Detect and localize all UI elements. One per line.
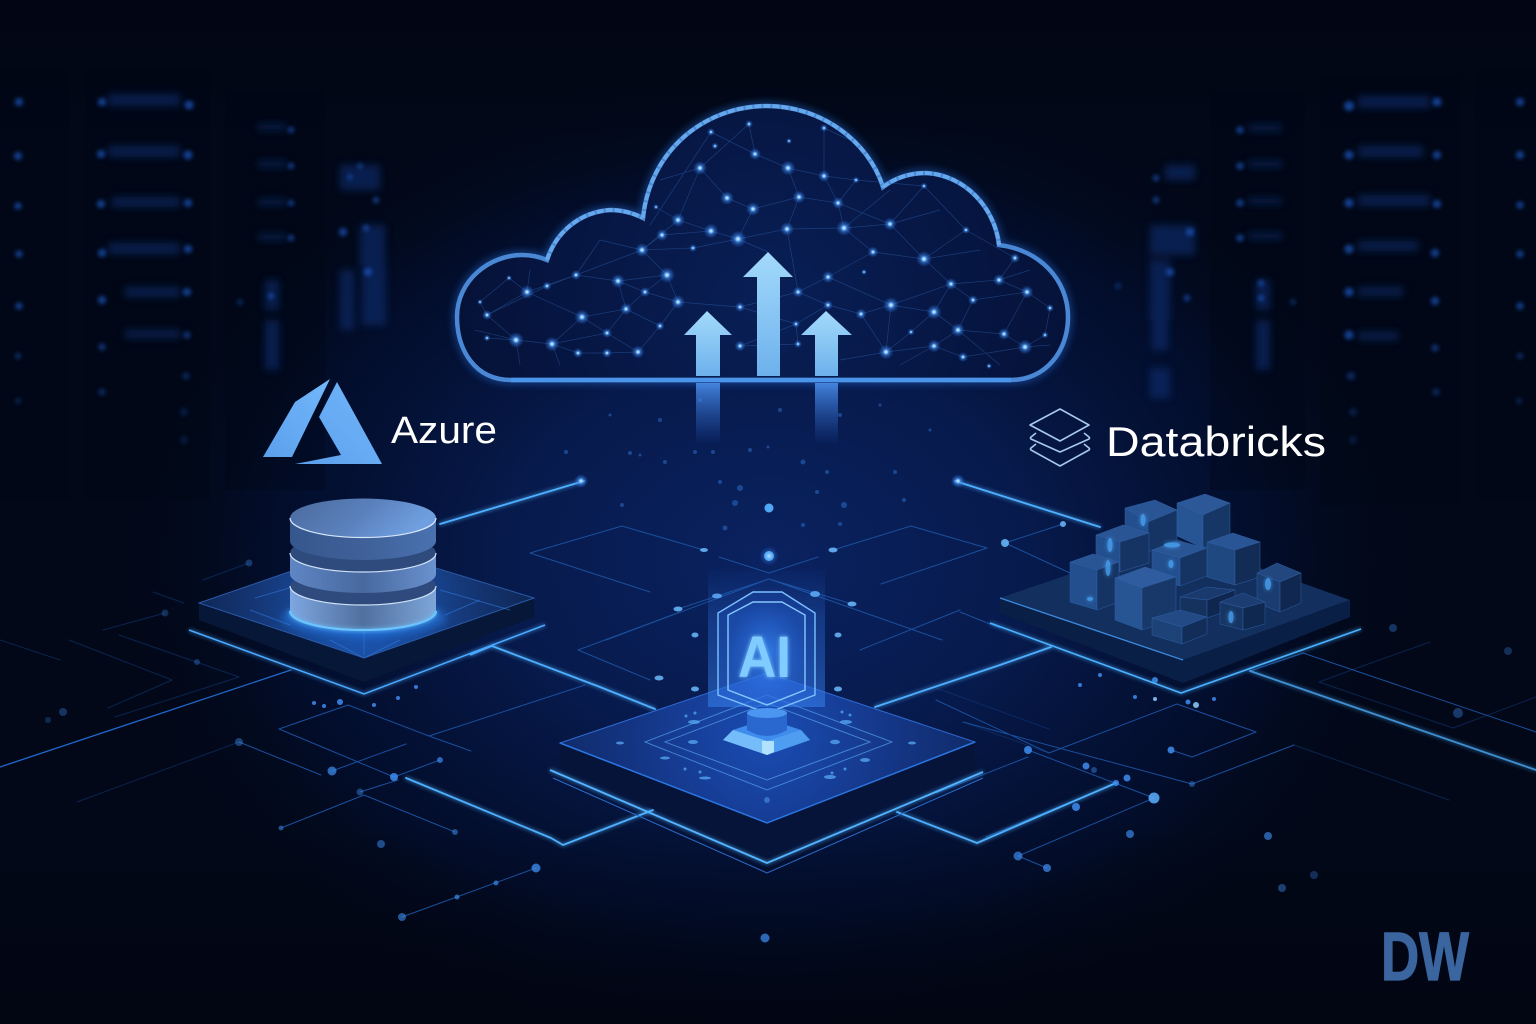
server racks: left bbox=[0, 70, 386, 500]
pedestal stem bbox=[747, 713, 787, 736]
arrow: left bbox=[684, 311, 732, 376]
cube: back left bbox=[1125, 500, 1177, 552]
outer thin frame bbox=[553, 778, 983, 873]
pedestal base bbox=[723, 725, 810, 755]
connector: right bbox=[951, 383, 965, 488]
server racks: right bbox=[1115, 70, 1536, 505]
disk: top bbox=[290, 498, 436, 560]
connector: left bbox=[574, 383, 588, 488]
cube: lower right bbox=[1220, 593, 1265, 630]
cube: back right bbox=[1177, 494, 1230, 548]
floating particles bbox=[564, 398, 932, 530]
arrow: centre bbox=[743, 252, 793, 376]
cube: right bbox=[1207, 533, 1260, 585]
cloud body bbox=[457, 106, 1068, 380]
pedestal collar bbox=[747, 708, 787, 718]
cube: far right bbox=[1257, 563, 1301, 612]
cube: front centre bbox=[1115, 567, 1176, 630]
cube highlights bbox=[1087, 514, 1271, 623]
pedestal left slab bbox=[723, 730, 767, 755]
chip side bbox=[560, 742, 975, 857]
platform top bbox=[199, 546, 534, 658]
cube: flat centre bbox=[1180, 587, 1235, 618]
cubes platform bbox=[990, 538, 1361, 693]
data cubes bbox=[1070, 494, 1301, 644]
inner traces bbox=[645, 695, 892, 790]
cube: centre bbox=[1152, 541, 1207, 586]
shield inner bbox=[728, 602, 805, 705]
platform top bbox=[1000, 538, 1350, 660]
cloud top highlight bbox=[547, 106, 999, 260]
label: Databricks: Databricks bbox=[1106, 418, 1326, 465]
network nodes bbox=[477, 120, 1054, 369]
platform side bbox=[1000, 598, 1350, 683]
bright circuit traces bbox=[406, 481, 1536, 845]
outer frame bbox=[189, 625, 545, 694]
network lines bbox=[475, 124, 1050, 365]
arrow beams below cloud bbox=[696, 383, 838, 445]
connector: centre bbox=[759, 383, 779, 566]
light column bbox=[708, 570, 825, 707]
cloud outline glow bbox=[457, 106, 1068, 380]
platform circuit marks bbox=[250, 585, 510, 658]
cloud base bar bbox=[511, 378, 1011, 382]
database icon bbox=[282, 498, 446, 636]
base glow bbox=[282, 600, 446, 636]
icon: stacked layers bbox=[1030, 409, 1090, 466]
floor nodes and particles bbox=[45, 521, 1512, 942]
disk: middle bbox=[290, 534, 436, 593]
chip marks bbox=[616, 710, 916, 803]
Azure logo bbox=[263, 379, 497, 464]
disk: bottom bbox=[290, 567, 436, 630]
watermark: DW: DW bbox=[1381, 918, 1470, 995]
pedestal bbox=[723, 708, 810, 755]
AI hologram bbox=[708, 570, 825, 755]
platform side bbox=[199, 598, 534, 682]
database platform bbox=[189, 546, 545, 694]
label: Azure: Azure bbox=[391, 410, 497, 452]
icon: Azure triangle bbox=[263, 379, 382, 464]
chip edge highlight bbox=[560, 742, 975, 823]
label: AI: AI bbox=[738, 625, 791, 690]
cloud bbox=[457, 106, 1068, 445]
cube: middle left bbox=[1096, 525, 1149, 572]
shield outer bbox=[718, 592, 815, 713]
chip top bbox=[560, 673, 975, 823]
cube: front left bbox=[1070, 554, 1119, 610]
pedestal front band bbox=[762, 741, 774, 755]
outer frame bbox=[550, 770, 983, 863]
outer frame bbox=[990, 623, 1361, 693]
circuit floor lines bbox=[0, 524, 1536, 917]
AI chip platform bbox=[550, 673, 983, 873]
pedestal right slab bbox=[767, 730, 810, 755]
Databricks logo bbox=[1030, 409, 1326, 466]
cube: flat front bbox=[1152, 610, 1207, 644]
arrow: right bbox=[801, 311, 852, 376]
platform edge bbox=[1000, 598, 1183, 660]
